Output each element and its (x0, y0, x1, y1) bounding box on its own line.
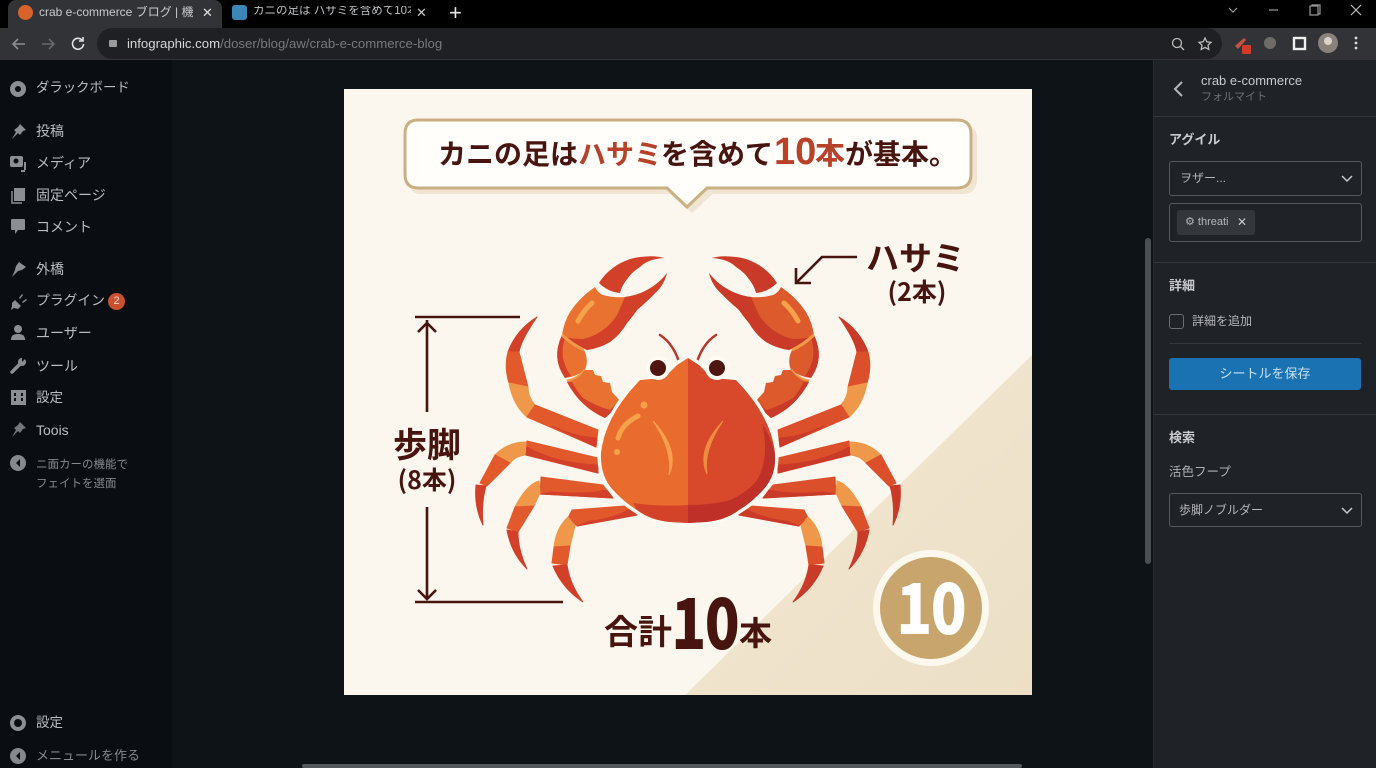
section heading: style: アグイル (1169, 132, 1220, 147)
menu: create menu: メニュールを作る (36, 748, 140, 763)
browser toolbar (0, 28, 1376, 60)
menu: comments (11, 219, 92, 235)
menu: collapse note: ニ面カーの機能で (36, 459, 128, 471)
menu: users: ユーザー (36, 325, 92, 341)
tab close icon: ✕ (202, 5, 213, 20)
url text: infographic.com/doser/blog/aw/crab-e-commerce-blog (127, 36, 442, 51)
claw label with arrow (796, 232, 965, 309)
badge: 10: 10 (897, 557, 966, 653)
checkbox label: 詳細を追加 (1192, 314, 1252, 328)
checkbox (1169, 314, 1184, 329)
menu: plugins with badge (11, 293, 125, 310)
infographic image (344, 89, 1032, 695)
antennae (660, 335, 716, 365)
menu: pages: 固定ページ (36, 187, 106, 203)
menu: posts (12, 123, 64, 139)
right legs and claw (709, 256, 900, 602)
title text: を含めて (661, 133, 773, 173)
menu: dashboard: ダラックボード (36, 80, 130, 95)
new tab button: + (449, 0, 462, 25)
walking legs dimension (393, 317, 563, 602)
menu: tools (10, 358, 78, 374)
menu: settings: 設定 (36, 390, 63, 405)
menu: dashboard (10, 80, 130, 97)
menu: settings (11, 390, 63, 405)
menu: appearance: 外橋 (36, 261, 64, 277)
select value: ヲザー... (1180, 171, 1226, 185)
icon: back chevron (1174, 81, 1183, 97)
tag input (1169, 203, 1362, 242)
field label: 活色フープ (1169, 465, 1231, 479)
right eye (705, 356, 729, 380)
badge: 10 (873, 550, 989, 666)
panel header (1174, 73, 1302, 103)
icon: tab favicon (18, 5, 33, 20)
shell highlights (618, 416, 638, 438)
active tab (8, 0, 222, 28)
label: claws: ハサミ (866, 232, 965, 280)
menu: media: メディア (36, 155, 91, 171)
select value: 歩脚ノブルダー (1179, 503, 1263, 517)
menu: media (10, 155, 91, 172)
bottom scrollbar (302, 764, 1022, 768)
icon: second tab favicon (232, 5, 247, 20)
extension icons (1235, 33, 1358, 54)
icon: chevron (1342, 508, 1352, 514)
menu: collapse note: フェイトを選面 (36, 478, 116, 490)
title text: ハサミ (578, 133, 662, 173)
left legs and claw (476, 256, 667, 602)
browser tab bar (0, 0, 1376, 28)
window controls (1228, 4, 1362, 16)
menu: appearance (12, 261, 64, 277)
sidebar menu (10, 80, 140, 764)
save button: シートルを保存 (1219, 366, 1310, 381)
menu: comments: コメント (36, 219, 92, 235)
menu: tools latin (12, 422, 69, 438)
body shadow (633, 503, 688, 523)
panel title: crab e-commerce (1201, 73, 1302, 88)
tag chip (1177, 210, 1255, 235)
left admin sidebar (0, 60, 172, 768)
icon: chevron (1342, 176, 1352, 182)
menu: collapse note (10, 455, 128, 490)
icon: lock (109, 40, 117, 47)
label: legs: 歩脚 (393, 418, 461, 467)
section heading: search: 検索 (1169, 430, 1195, 445)
total label (604, 572, 772, 668)
crab body (601, 358, 775, 523)
menu: tools latin: Toois (36, 422, 69, 438)
left eye (646, 356, 670, 380)
menu: tools: ツール (36, 358, 78, 374)
total number: 10 (672, 572, 739, 668)
label: claws count: (2本) (888, 273, 946, 309)
navigation buttons (12, 37, 84, 50)
title text: 本 (815, 129, 845, 173)
chip close icon: ✕ (1237, 215, 1247, 229)
chip label: ⚙ threati (1185, 216, 1228, 228)
second tab (232, 5, 427, 20)
crab (476, 256, 900, 602)
menu: posts: 投稿 (36, 123, 64, 139)
style select (1169, 161, 1362, 196)
canvas scrollbar (1145, 238, 1151, 564)
dividers (1154, 116, 1376, 117)
panel subtitle: フォルマイト (1201, 91, 1267, 103)
right settings panel (1153, 60, 1376, 768)
title speech bubble (405, 120, 977, 213)
address bar (97, 28, 1222, 59)
menu: pages (11, 187, 106, 204)
menu: bottom settings (10, 715, 63, 731)
checkbox row (1169, 314, 1252, 329)
title text: カニの足は (438, 133, 578, 173)
menu: users (11, 325, 92, 341)
diagonal corner panel (685, 355, 1032, 695)
title text: が基本。 (845, 133, 957, 173)
title text: 10 (774, 131, 816, 173)
divider (1169, 343, 1361, 344)
second tab close icon: ✕ (416, 5, 427, 20)
total unit: 本 (739, 607, 772, 655)
arrow to claw (796, 257, 857, 283)
panel background (344, 89, 1032, 695)
section heading: details: 詳細 (1169, 278, 1195, 293)
address bar icons (1172, 36, 1212, 51)
save button (1169, 358, 1361, 390)
menu: plugins with badge: プラグイン (36, 293, 105, 308)
total prefix: 合計 (604, 605, 672, 654)
menu: plugins with badge: 2 (113, 295, 120, 307)
menu: bottom settings: 設定 (36, 715, 63, 730)
dimension lines and arrows (415, 317, 563, 602)
bottom select (1169, 493, 1362, 527)
label: legs count: (8本) (398, 461, 456, 497)
